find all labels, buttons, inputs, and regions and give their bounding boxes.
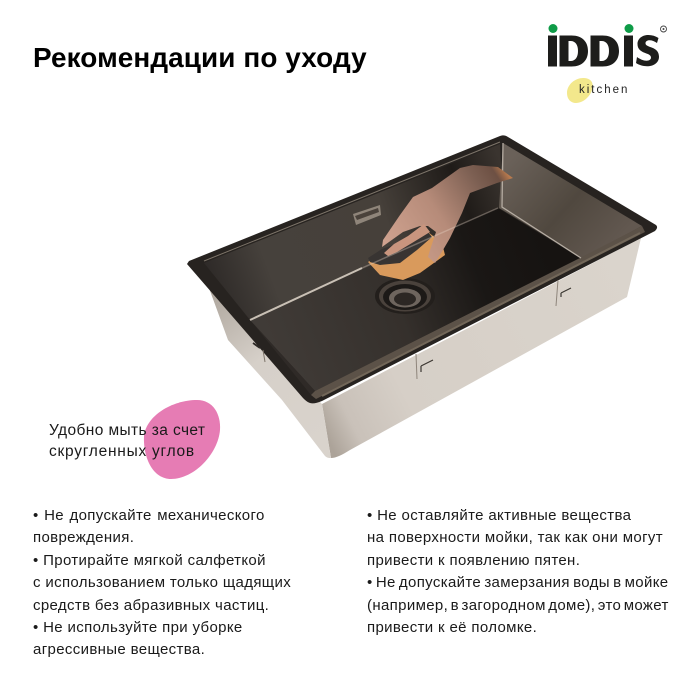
hand xyxy=(382,165,513,263)
rim highlights xyxy=(204,142,640,396)
right care list: на поверхности мойки, так как они могут xyxy=(367,529,663,546)
logo wordmark xyxy=(548,24,659,66)
right care list: • Не допускайте замерзания воды в мойке xyxy=(367,574,668,591)
left care list: с использованием только щадящих xyxy=(33,574,291,591)
left care list: • Не используйте при уборке xyxy=(33,619,243,636)
right care list: привести к появлению пятен. xyxy=(367,552,580,569)
left care list: • Не допускайте механического xyxy=(33,507,265,524)
blob caption xyxy=(49,422,205,460)
left care list: средств без абразивных частиц. xyxy=(33,597,269,614)
kitchen label: kitchen xyxy=(579,84,629,96)
clip: front centre xyxy=(416,354,433,379)
sink right wall xyxy=(499,143,642,258)
right care list: привести к её поломке. xyxy=(367,619,537,636)
drain xyxy=(375,278,435,314)
blob caption: Удобно мыть за счет xyxy=(49,422,205,439)
left care list: агрессивные вещества. xyxy=(33,641,205,658)
left care list: • Протирайте мягкой салфеткой xyxy=(33,552,266,569)
sink rim xyxy=(187,135,657,403)
sink left and front wall xyxy=(204,226,645,399)
registered mark xyxy=(660,26,666,32)
title: Рекомендации по уходу xyxy=(33,42,367,73)
yellow blob xyxy=(567,78,593,103)
left care list: повреждения. xyxy=(33,529,134,546)
sponge xyxy=(368,232,445,280)
sink back wall xyxy=(204,144,503,320)
sink floor xyxy=(250,208,580,391)
right care list: (например, в загородном доме), это может xyxy=(367,597,669,614)
highlight streak across hand xyxy=(362,208,498,268)
blob caption: скругленных углов xyxy=(49,443,195,460)
overflow slot xyxy=(353,205,381,225)
clip: front left xyxy=(253,343,265,362)
left care list xyxy=(33,507,291,658)
right care list: • Не оставляйте активные вещества xyxy=(367,507,631,524)
right care list xyxy=(367,507,669,636)
logo: IDDIS kitchen xyxy=(548,24,667,103)
clip: front right xyxy=(556,280,571,306)
sink body xyxy=(209,238,641,458)
